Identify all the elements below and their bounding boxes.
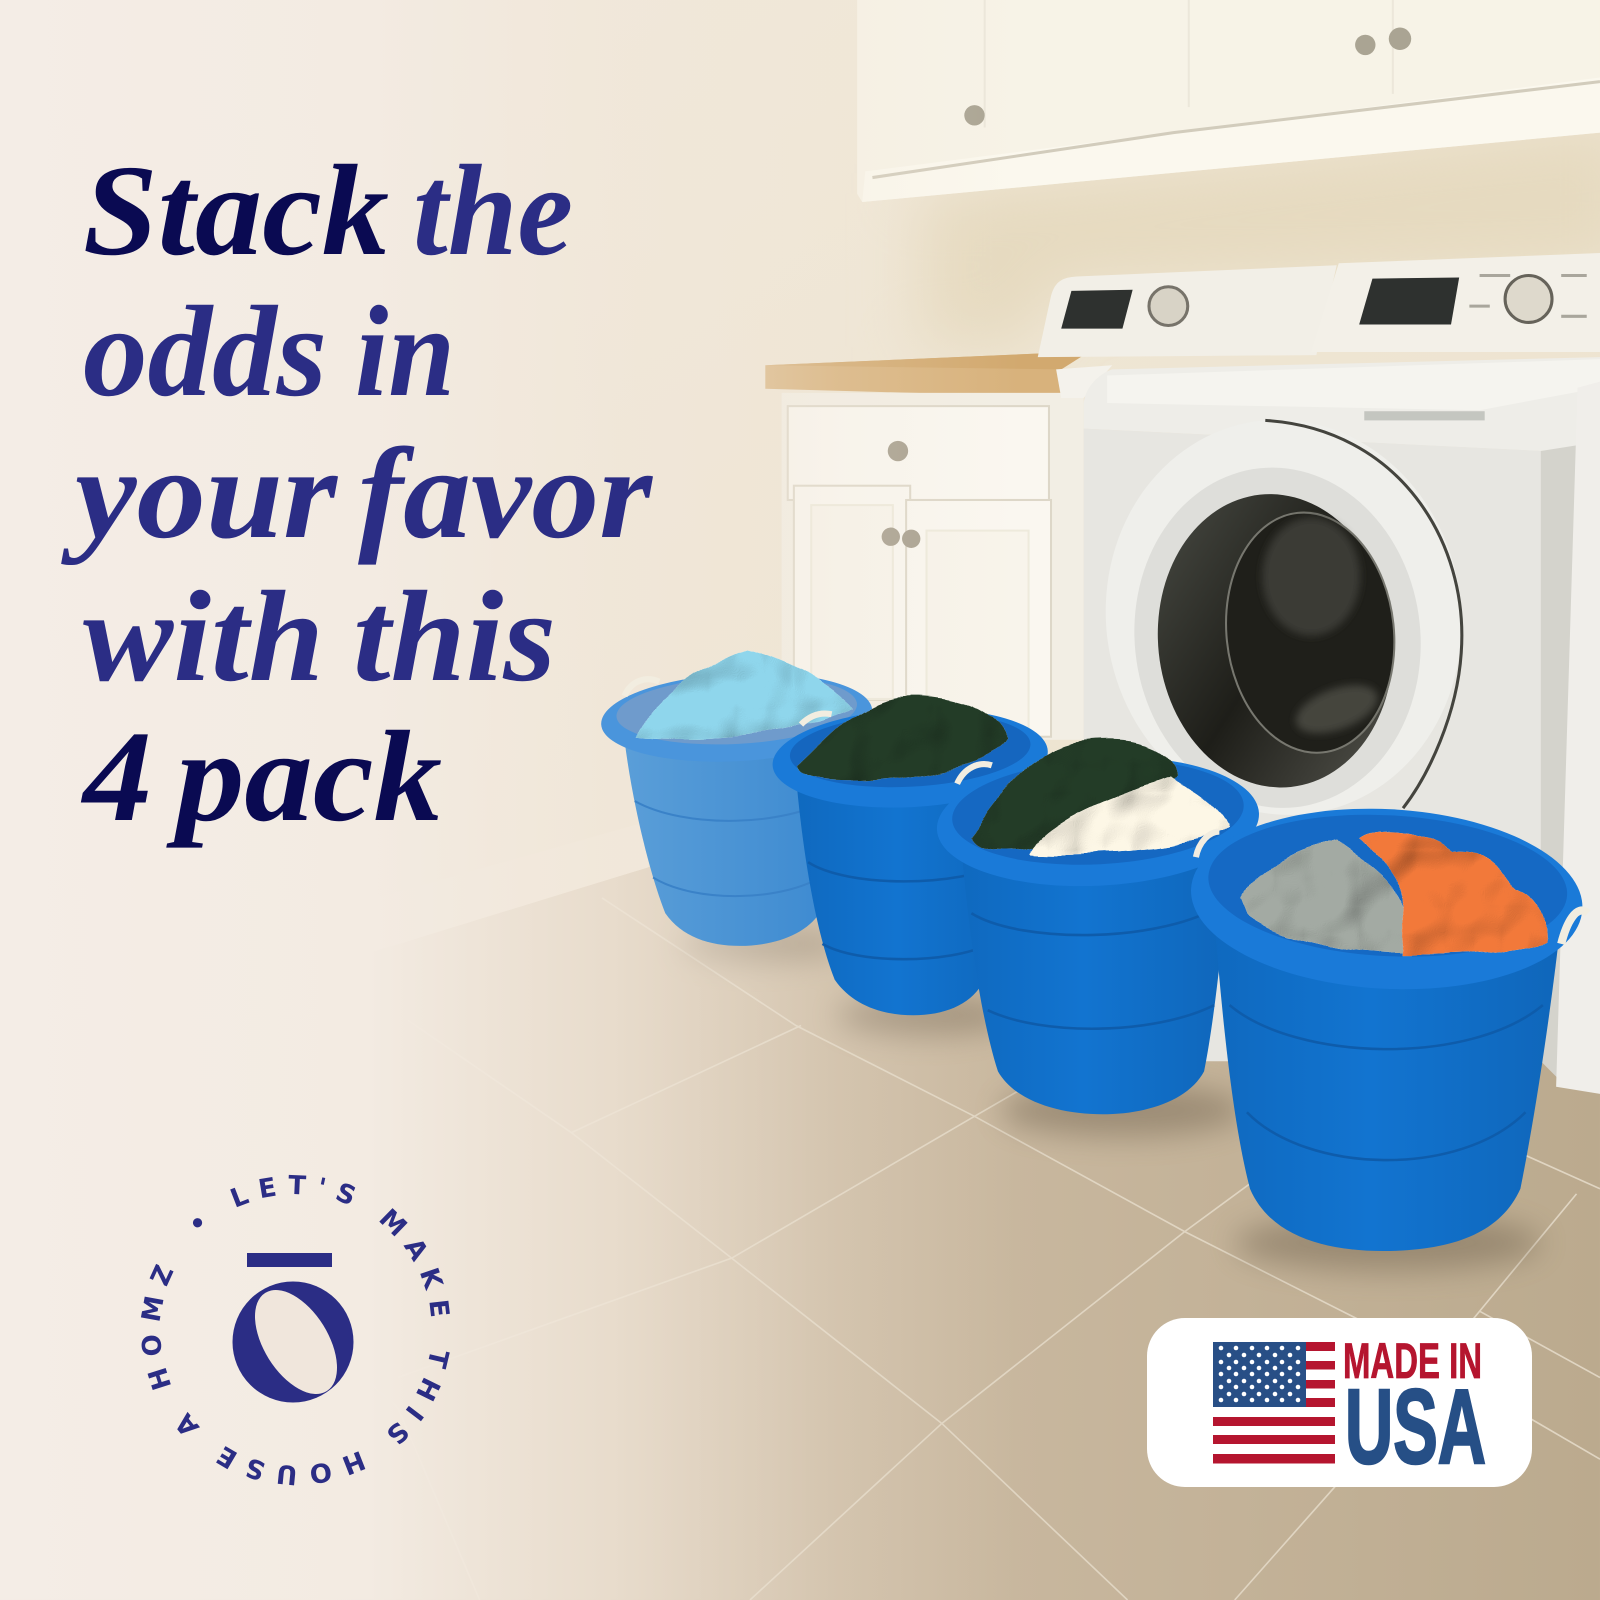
usa text: USA — [1345, 1368, 1486, 1486]
headline line 5: 4 — [80, 705, 152, 849]
headline line 5 — [80, 705, 442, 849]
dryer side — [1556, 382, 1600, 1094]
headline line 4: with — [83, 565, 324, 709]
headline — [60, 139, 653, 849]
washer door ring — [1080, 397, 1487, 838]
headline line 2 — [83, 280, 455, 424]
american flag — [1213, 1342, 1335, 1464]
made in usa badge — [1147, 1318, 1532, 1487]
fade overlay — [0, 0, 1020, 1600]
headline line 1 — [83, 139, 573, 283]
headline line 2: in — [355, 280, 455, 424]
upper cabinet — [857, 0, 1600, 202]
floor — [0, 796, 1600, 1600]
headline line 1: the — [413, 139, 573, 283]
washing machine — [1056, 253, 1600, 1094]
headline line 4: this — [353, 565, 556, 709]
bucket floor shadows — [679, 926, 1541, 1271]
drawer — [788, 406, 1049, 500]
washer front — [1084, 429, 1543, 1061]
washer side — [1541, 445, 1580, 1082]
headline line 3: favor — [358, 422, 653, 566]
bucket 4: gray and orange towels — [1186, 799, 1588, 1251]
baseboard — [0, 821, 648, 1066]
logo ring text: • LET'S MAKE THIS HOUSE A HOMZ — [140, 1174, 450, 1486]
logo letter o — [232, 1276, 354, 1408]
dryer control panel — [1038, 265, 1337, 357]
left door — [794, 486, 910, 700]
bucket 1: light blue towel — [599, 648, 875, 946]
rope handles — [624, 679, 1219, 857]
wall shadow under cabinet — [918, 122, 1600, 347]
washer control panel — [1311, 253, 1600, 352]
bucket 2: dark green towel — [770, 695, 1050, 1015]
base cabinet — [782, 393, 1084, 740]
headline line 3 — [60, 422, 653, 566]
wall — [0, 0, 1600, 1122]
headline line 3: your — [60, 422, 339, 566]
wood counter — [765, 353, 1084, 397]
cabinet knobs — [964, 28, 1411, 126]
circular logo — [140, 1174, 450, 1486]
made in text: MADE IN — [1343, 1333, 1482, 1389]
counter corner — [1056, 365, 1112, 398]
base cabinet knobs — [882, 441, 920, 548]
headline line 4 — [83, 565, 556, 709]
headline line 1: Stack — [83, 139, 389, 283]
washer glass — [1143, 482, 1408, 799]
logo macron bar — [247, 1253, 332, 1267]
headline line 2: odds — [83, 280, 327, 424]
bucket 3: dark green and cream towels — [934, 740, 1262, 1114]
washer top — [1084, 357, 1600, 451]
badge background — [1147, 1318, 1532, 1487]
rope handle — [1561, 911, 1588, 944]
headline line 5: pack — [165, 705, 442, 849]
floor tile grout lines — [204, 898, 1600, 1600]
right door — [906, 500, 1051, 737]
